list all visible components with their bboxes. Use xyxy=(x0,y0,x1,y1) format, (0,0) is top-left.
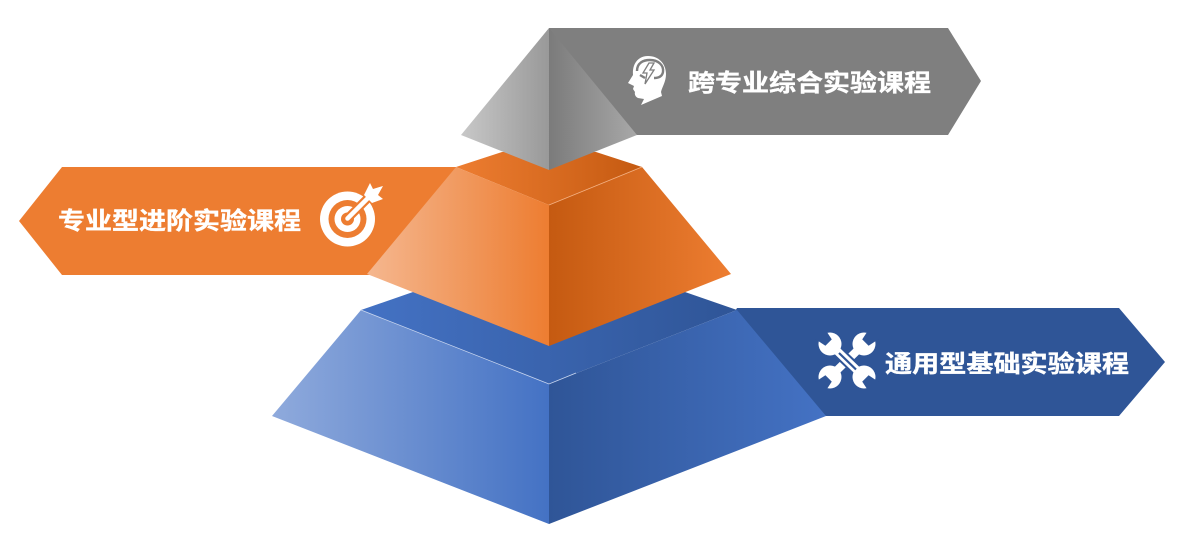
pyramid: gray top tier xyxy=(461,28,637,170)
banner text: advanced major courses: 专业型进阶实验课程 xyxy=(58,207,301,235)
banner text: general foundation courses: 通用型基础实验课程 xyxy=(885,350,1129,378)
pyramid: orange middle tier xyxy=(367,152,731,346)
banner: advanced major courses xyxy=(19,167,470,275)
icon: target with arrow xyxy=(320,183,383,246)
banner text: interdisciplinary courses: 跨专业综合实验课程 xyxy=(688,69,931,97)
icon: head with lightning brain xyxy=(628,56,666,105)
icon: crossed wrenches xyxy=(812,326,882,395)
banner: interdisciplinary courses xyxy=(549,28,981,135)
pyramid: blue base tier xyxy=(272,292,826,524)
banner: general foundation courses xyxy=(730,308,1165,416)
